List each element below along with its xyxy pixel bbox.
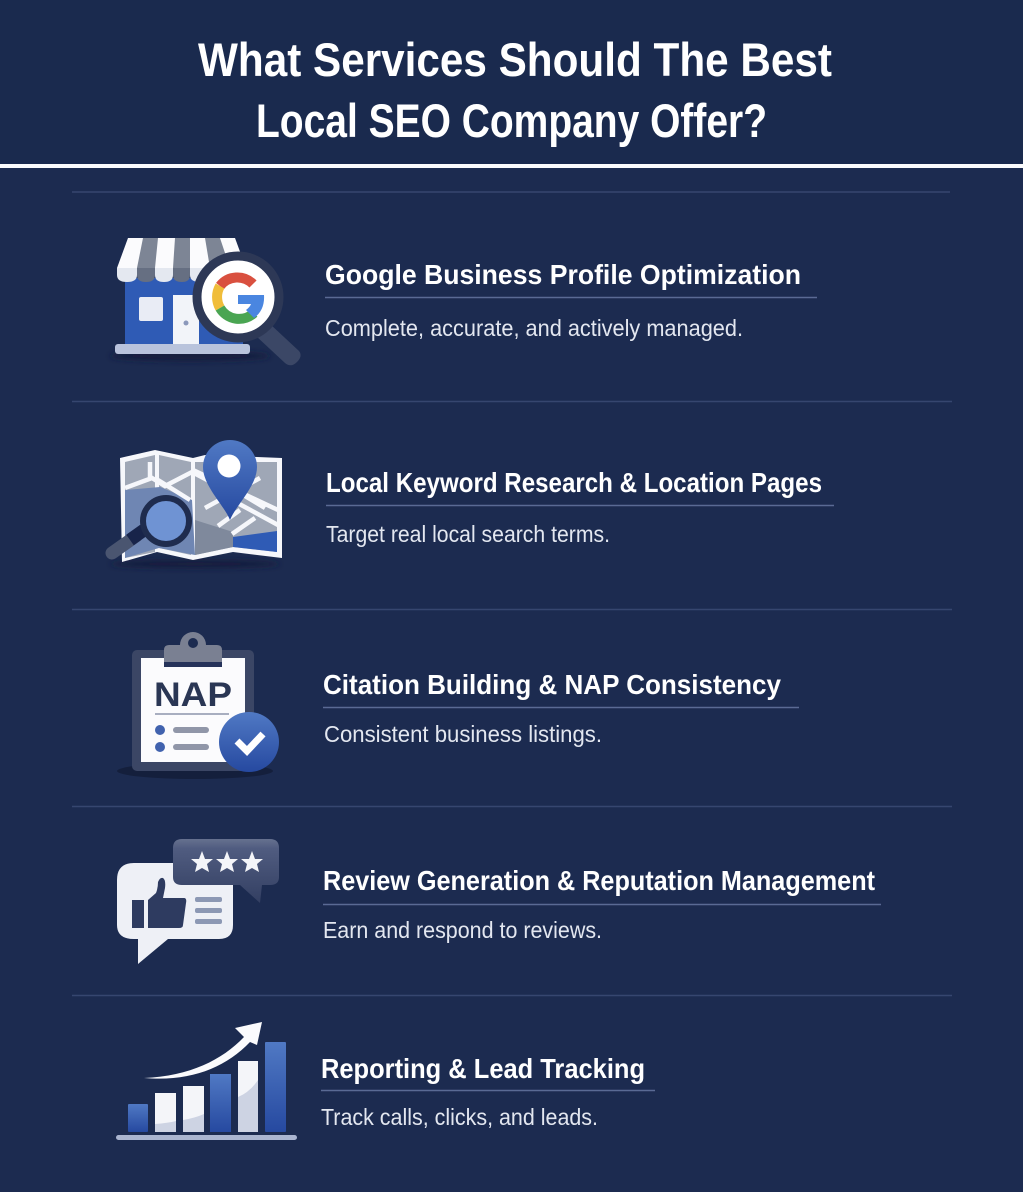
icon: storefront with Google magnifier (110, 238, 301, 365)
heading: Reporting & Lead Tracking (321, 1053, 645, 1084)
description: Track calls, clicks, and leads. (321, 1104, 598, 1130)
panel: Reporting and Lead Tracking (116, 1022, 655, 1140)
icon: thumbs up and star speech bubbles (117, 839, 279, 964)
heading: Google Business Profile Optimization (325, 259, 801, 290)
icon: NAP clipboard with check badge (117, 632, 279, 779)
icon: map with pin and magnifier (110, 440, 282, 568)
icon: growth bar chart with arrow (116, 1022, 297, 1140)
description: Complete, accurate, and actively managed. (325, 315, 743, 341)
heading: Citation Building & NAP Consistency (323, 669, 781, 700)
header band (0, 0, 1023, 168)
heading: Review Generation & Reputation Management (323, 865, 875, 896)
description: Target real local search terms. (326, 521, 610, 547)
panel: Google Business Profile (110, 238, 817, 365)
title (198, 33, 832, 147)
title: Local SEO Company Offer? (256, 94, 767, 147)
description: Earn and respond to reviews. (323, 917, 602, 943)
heading: Local Keyword Research & Location Pages (326, 467, 822, 498)
panel: Citation Building (117, 632, 799, 779)
panel: Local Keyword Research (110, 440, 834, 568)
panel: Review Generation (117, 839, 881, 964)
icon: NAP clipboard with check badge: NAP (154, 676, 232, 714)
description: Consistent business listings. (324, 721, 602, 747)
title: What Services Should The Best (198, 33, 832, 86)
